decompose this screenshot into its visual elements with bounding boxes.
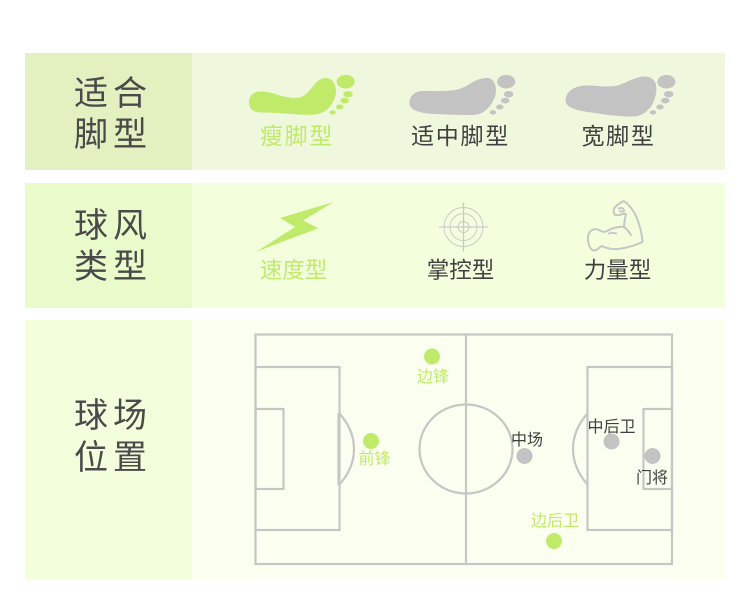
marker: midfielder — [511, 431, 543, 464]
heading: foot type: 脚型 — [74, 116, 152, 154]
heading: play style: 球风 — [74, 207, 152, 245]
heading: foot type: 适合 — [74, 75, 152, 113]
marker: wing back: 边后卫 — [531, 512, 579, 530]
marker: goalkeeper: 门将 — [636, 469, 668, 487]
heading: field position: 位置 — [74, 439, 152, 477]
marker: forward — [358, 433, 391, 468]
panel: play style — [25, 183, 725, 308]
label: power: 力量型 — [584, 258, 651, 283]
marker: midfielder: 中场 — [511, 431, 543, 449]
panel: field position — [25, 320, 725, 580]
marker: wing back — [531, 512, 579, 549]
label: medium foot: 适中脚型 — [411, 123, 510, 149]
icon: wide foot — [566, 75, 675, 117]
icon: lightning bolt — [257, 202, 334, 252]
icon: flexed arm — [588, 201, 642, 251]
marker: center back: 中后卫 — [587, 418, 636, 436]
label: speed: 速度型 — [260, 258, 327, 283]
marker: forward: 前锋 — [358, 450, 391, 468]
panel: foot type — [25, 53, 725, 170]
label: control: 掌控型 — [427, 258, 494, 283]
label: wide foot: 宽脚型 — [581, 123, 656, 149]
soccer pitch — [256, 334, 672, 564]
label: slim foot: 瘦脚型 — [260, 123, 334, 149]
heading: field position: 球场 — [74, 397, 152, 435]
marker: winger — [417, 348, 449, 386]
marker: winger: 边锋 — [417, 368, 449, 386]
heading: play style: 类型 — [74, 248, 152, 286]
marker: center back — [587, 418, 636, 450]
icon: slim foot — [249, 75, 355, 115]
icon: crosshair target — [439, 202, 488, 252]
marker: goalkeeper — [636, 448, 668, 487]
icon: medium foot — [409, 75, 515, 115]
